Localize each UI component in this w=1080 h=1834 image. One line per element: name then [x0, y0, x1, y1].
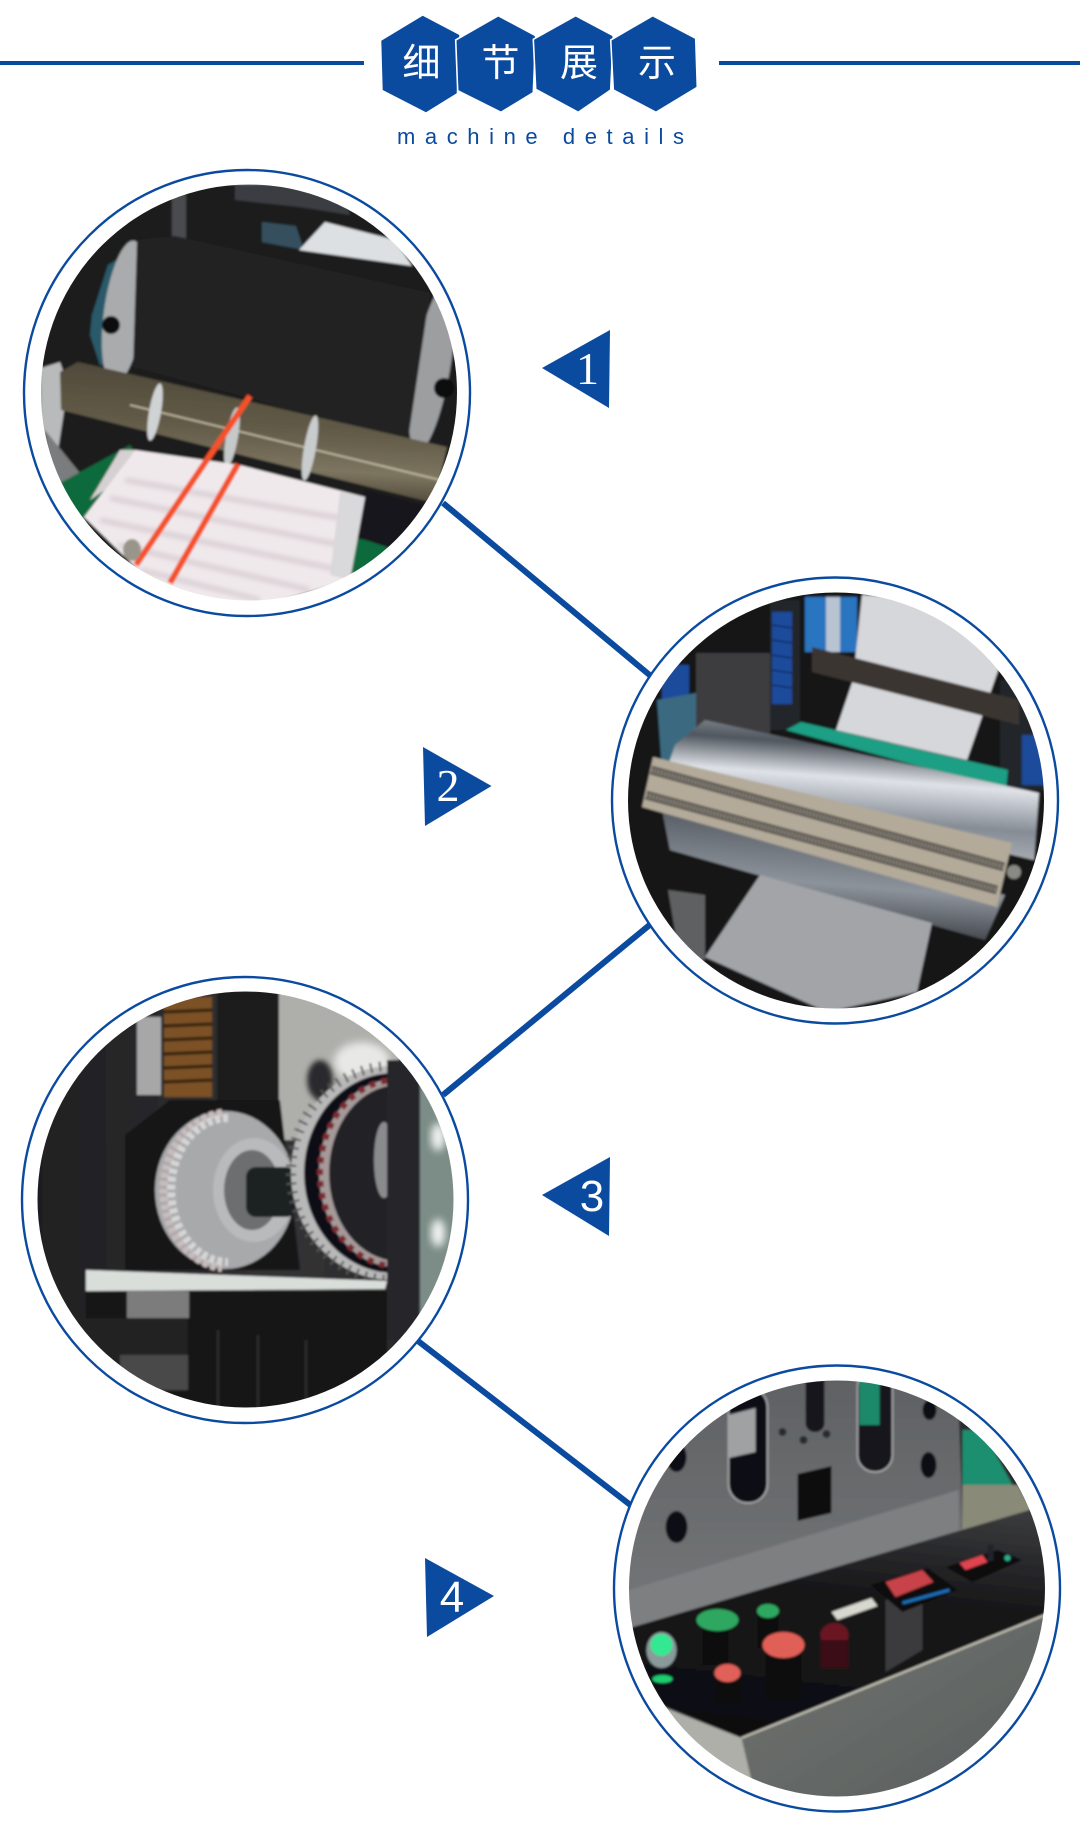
green strip: [786, 722, 1008, 790]
title: hexagon badges: [381, 16, 697, 112]
connector: 2 to 3: [443, 923, 652, 1095]
ear bands: [136, 396, 250, 565]
bracket: [125, 1100, 300, 1270]
hexagon: 细: 细: [402, 43, 441, 85]
arrow marker 3: [542, 1157, 610, 1236]
square cutout: [798, 1466, 832, 1521]
dark column: [217, 990, 279, 1100]
green belts: [60, 445, 140, 520]
roller rings: [144, 382, 166, 442]
panel: detail photo 4: [614, 1366, 1060, 1812]
arrow marker 2: 2: [436, 760, 460, 811]
photo: timing pulleys: [38, 992, 454, 1408]
photo: rollers and mask: [40, 184, 464, 610]
silver ring left: [100, 238, 139, 375]
black roller: [133, 236, 430, 440]
buttons: [702, 1625, 728, 1665]
black base: [86, 1291, 387, 1416]
header line: left: [0, 61, 364, 65]
white panel: [299, 222, 412, 266]
green guide: [962, 1430, 1012, 1485]
hexagon: 节: [456, 16, 536, 112]
holes: [666, 1511, 688, 1543]
hexagon: 示: 示: [638, 43, 676, 85]
arrow marker 3: 3: [580, 1172, 604, 1221]
needle bar: [642, 757, 1012, 907]
pulley one: [155, 1111, 295, 1269]
hole left: [102, 316, 120, 334]
pale right panel: [418, 1084, 454, 1315]
teal bracket: [88, 259, 117, 366]
connector: 3 to 4: [418, 1341, 633, 1507]
white plate: [86, 1270, 387, 1291]
arrow marker 4: [425, 1558, 494, 1637]
photo: silver roller: [625, 590, 1050, 1015]
panel: detail photo 1: [24, 170, 470, 616]
bronze roller: [60, 362, 447, 503]
shaft: [246, 1167, 296, 1217]
panel: detail photo 2: [612, 578, 1058, 1024]
dark right column: [385, 1058, 422, 1286]
left metal parts: [41, 360, 66, 448]
screw: [1007, 865, 1021, 879]
hexagon: 展: 展: [560, 43, 598, 85]
arrow marker 4: 4: [440, 1573, 464, 1622]
silver ring right: [408, 296, 454, 444]
lower roller: [660, 800, 1005, 940]
arrow marker 1: 1: [576, 343, 599, 394]
small post: [123, 539, 141, 561]
header line: right: [719, 61, 1080, 65]
dark roller: [812, 647, 1019, 725]
arrow marker 1: [542, 330, 610, 408]
arrow marker 2: [423, 747, 492, 826]
slots: [728, 1388, 768, 1503]
hexagon: 示: [611, 16, 697, 112]
photo: control panel: [622, 1370, 1052, 1805]
light background: [279, 990, 399, 1140]
hexagon: 展: [533, 16, 613, 112]
panel: detail photo 3: [22, 977, 493, 1423]
spring: [164, 997, 212, 1097]
label plate: [832, 1598, 878, 1620]
connector: 1 to 2: [443, 503, 652, 677]
springs: [772, 612, 792, 704]
mask body: [84, 450, 365, 610]
grey cabinet: [742, 1612, 1052, 1805]
black panel: [622, 1500, 1052, 1737]
meter one: [870, 1568, 958, 1672]
dark bottom: [640, 850, 985, 1010]
upper mask: [836, 595, 1000, 760]
hexagon: 节: 节: [481, 43, 520, 85]
needle rows: [651, 770, 1004, 867]
subtitle: machine details: [397, 124, 684, 149]
hexagon: 细: [381, 16, 459, 112]
pulley two: [285, 1060, 389, 1281]
grey plate: [622, 1375, 1048, 1630]
blue area: [805, 597, 857, 652]
silver roller: [665, 720, 1039, 860]
meter two: [946, 1545, 1022, 1582]
lower mask: [705, 875, 932, 1012]
